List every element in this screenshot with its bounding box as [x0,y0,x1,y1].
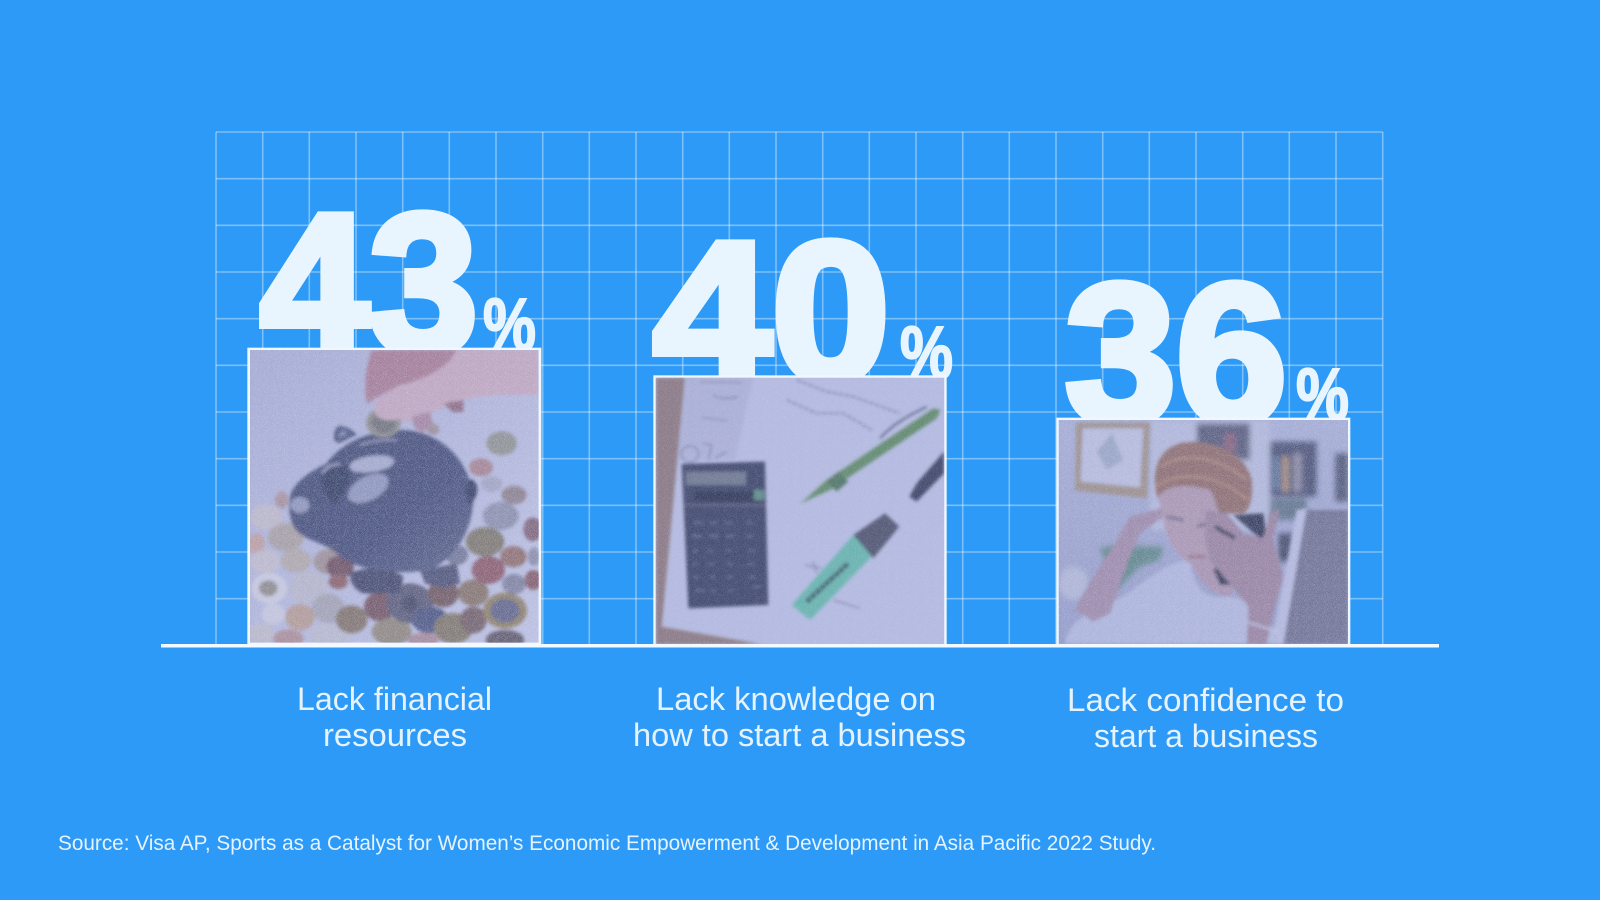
label: lack knowledge: Lack knowledge on [656,681,936,717]
photo: calculator, pen and highlighter on paper [653,375,947,646]
label: lack financial resources [297,681,492,753]
source note: Source: Visa AP, Sports as a Catalyst for Women’s Economic Empowerment & Development in Asia Pacific 2022 Study. [58,832,1156,855]
stat: 36%: % [1296,353,1349,436]
label: lack confidence: start a business [1094,718,1318,754]
stat: 40%: % [900,311,953,394]
label: lack confidence: Lack confidence to [1067,682,1344,718]
stat: 36%: 36 [1065,243,1287,466]
stat: 43%: 43 [260,173,478,396]
label: lack knowledge: how to start a business [633,717,966,753]
label: lack confidence [1067,682,1344,754]
photo: stressed woman on the phone [1056,418,1350,646]
stat: 43%: % [483,283,536,366]
grid [216,132,1383,645]
label: lack financial resources: Lack financial [297,681,492,717]
baseline [161,644,1439,648]
photo: hand placing coin in piggy bank [247,348,542,650]
label: lack knowledge [633,681,966,753]
stat: 40%: 40 [653,201,890,424]
label: lack financial resources: resources [323,717,467,753]
